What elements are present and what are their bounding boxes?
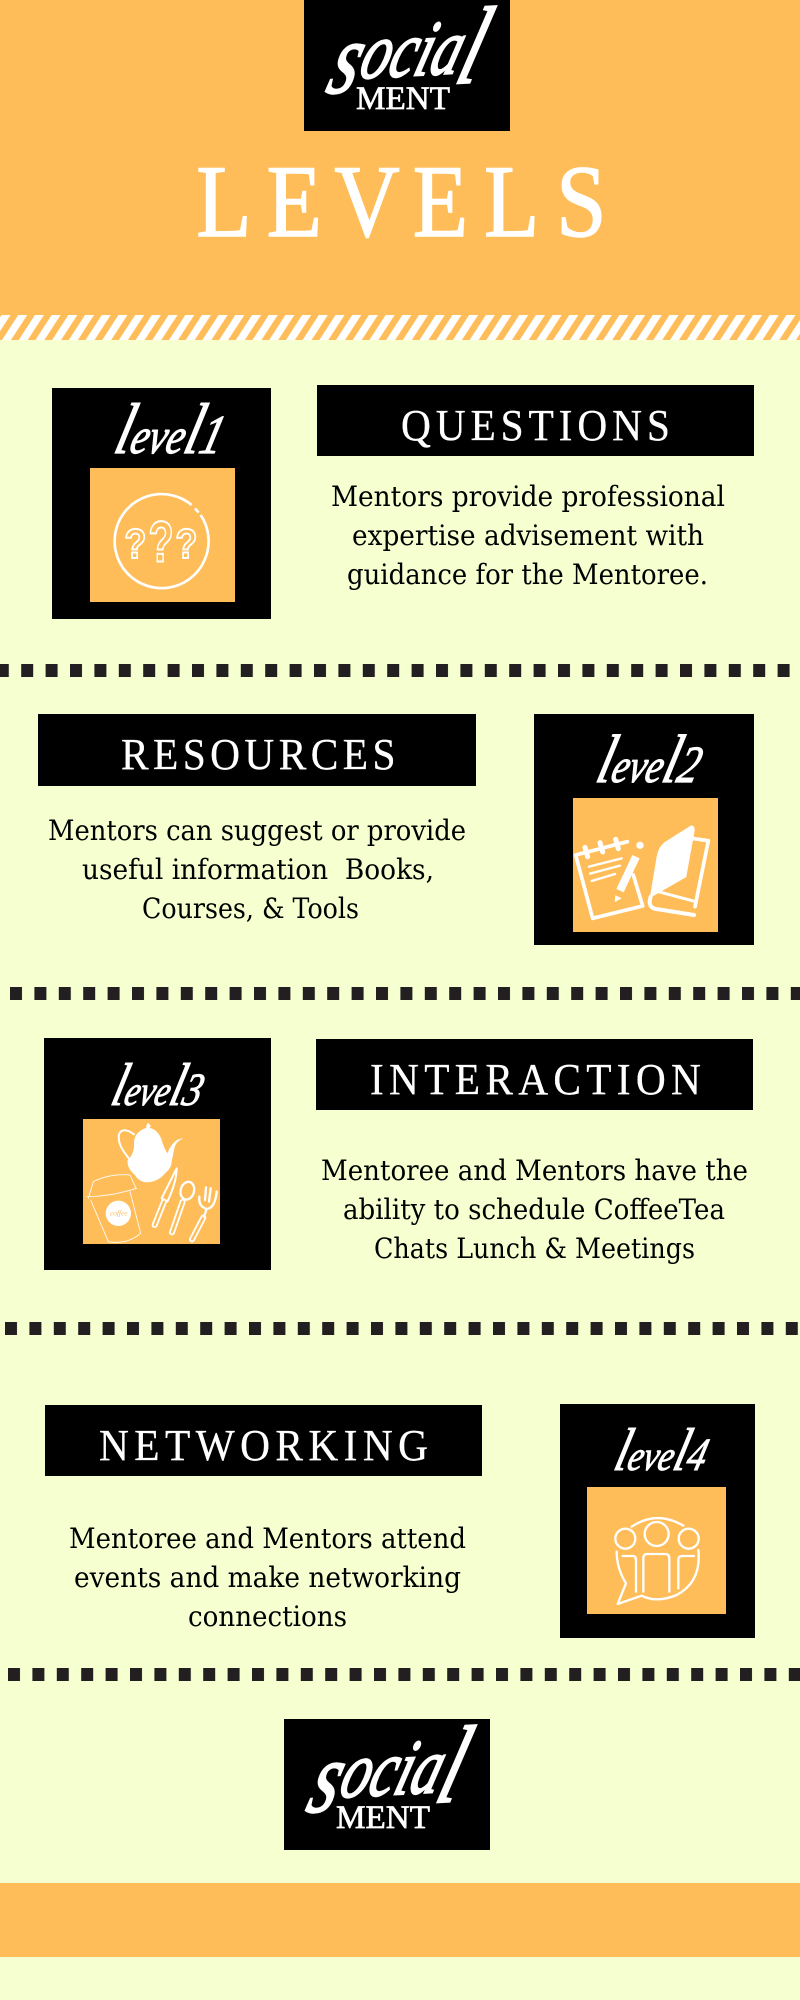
icon: question marks in circle: ?: [124, 520, 146, 567]
text: questions description: guidance for the Mentoree.: [347, 558, 708, 591]
panel: level 4 card: [560, 1404, 755, 1638]
logo: top: [304, 0, 510, 131]
icon: group in speech bubble: [615, 1518, 699, 1604]
text: interaction description: [321, 1154, 748, 1265]
text: interaction description: ability to schedule CoffeeTea: [343, 1193, 725, 1226]
logo: bottom: ocia: [331, 1722, 457, 1815]
heading: interaction: [316, 1039, 753, 1110]
text: questions description: Mentors provide professional: [331, 480, 725, 513]
text: resources description: [48, 814, 466, 925]
icon: notepad and book: [576, 826, 708, 918]
heading: interaction: INTERACTION: [370, 1056, 701, 1104]
heading: networking: NETWORKING: [99, 1422, 428, 1470]
heading: resources: [38, 714, 476, 786]
heading: questions: QUESTIONS: [401, 402, 670, 450]
icon: question marks in circle: ?: [175, 520, 197, 567]
text: networking description: events and make networking: [74, 1561, 461, 1594]
panel: level 3 card: [44, 1038, 271, 1270]
logo: bottom: [284, 1705, 490, 1850]
logo: top: MENT: [356, 81, 450, 117]
text: resources description: Courses, & Tools: [142, 892, 359, 925]
panel: level 1 card: [52, 388, 271, 619]
icon: teapot, cup and cutlery: coffee: [110, 1209, 128, 1218]
icon: question marks in circle: ?: [148, 510, 174, 574]
text: networking description: connections: [188, 1600, 347, 1633]
heading: resources: RESOURCES: [121, 731, 395, 779]
label: level 1: level1: [108, 390, 236, 469]
text: resources description: useful information Books,: [82, 853, 434, 886]
logo: bottom: l: [425, 1705, 485, 1827]
logo: top: ocia: [351, 3, 477, 96]
text: interaction description: Chats Lunch & Meetings: [374, 1232, 695, 1265]
text: networking description: Mentoree and Mentors attend: [69, 1522, 466, 1555]
logo: top: s: [317, 1, 381, 115]
label: level 3: level3: [105, 1052, 213, 1119]
label: level 4: level4: [608, 1417, 717, 1484]
text: networking description: [69, 1522, 466, 1633]
text: resources description: Mentors can suggest or provide: [48, 814, 466, 847]
footer band: [0, 1883, 800, 1957]
icon: question marks in circle: [115, 494, 209, 588]
logo: bottom: s: [297, 1720, 361, 1834]
heading: questions: [317, 385, 754, 456]
icon: teapot, cup and cutlery: [87, 1123, 217, 1242]
text: questions description: expertise advisement with: [352, 519, 704, 552]
title: LEVELS: [196, 145, 607, 258]
label: level 2: level2: [590, 721, 712, 797]
header band: [0, 0, 800, 340]
heading: networking: [45, 1405, 482, 1476]
text: questions description: [331, 480, 725, 591]
panel: level 2 card: [534, 714, 754, 945]
logo: bottom: MENT: [336, 1800, 430, 1836]
text: interaction description: Mentoree and Mentors have the: [321, 1154, 748, 1187]
